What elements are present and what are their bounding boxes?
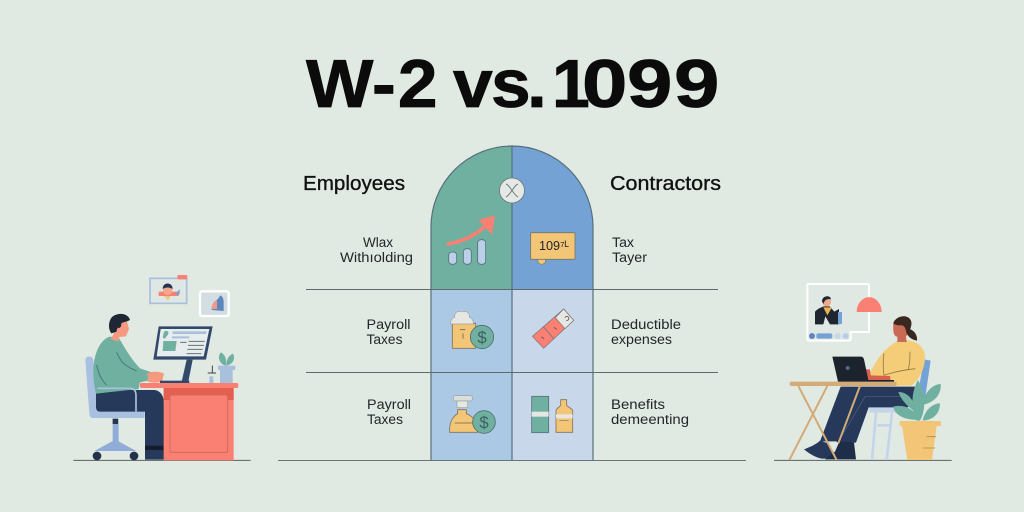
- icon: rising arrow and bars: [448, 215, 495, 264]
- floor line: [73, 459, 251, 462]
- title: vs.: [453, 46, 547, 122]
- hand: [147, 372, 164, 383]
- chair: [869, 359, 931, 460]
- icon: 1099 tax tag: [531, 233, 575, 264]
- icon: 1099 tax tag: 109⁷ᴸ: [539, 239, 570, 253]
- icon: bottle and dollar coin: $: [479, 413, 489, 432]
- potted plant: [218, 352, 235, 383]
- table: [789, 382, 897, 460]
- label: Wlax Withholding: Withıolding: [340, 250, 413, 265]
- head: [111, 320, 129, 342]
- label: Wlax Withholding: Wlax: [363, 235, 393, 250]
- title: [306, 45, 719, 122]
- floating white photo card: [200, 291, 229, 316]
- legs: [96, 390, 164, 460]
- label: Payroll Taxes row 3: Payroll: [367, 397, 411, 412]
- label: Payroll Taxes row 3: [367, 397, 411, 427]
- label: Benefits demeenting: [611, 397, 689, 427]
- label: Deductible expenses: expenses: [611, 332, 672, 347]
- icon: jar and dollar coin: [451, 311, 494, 349]
- heading: Contractors: Contractors: [610, 173, 721, 195]
- comparison arch table: [278, 146, 746, 460]
- illustration: contractor at table: [774, 284, 952, 460]
- shoes: [804, 441, 835, 459]
- arch outline: [431, 146, 593, 460]
- label: Tax Tayer: Tayer: [612, 250, 648, 265]
- legs: [820, 387, 918, 443]
- monitor: [153, 326, 213, 360]
- icon: versus badge: [500, 178, 524, 203]
- label: Payroll Taxes row 3: Taxes: [367, 412, 403, 427]
- label: Payroll Taxes row 2: Taxes: [366, 332, 403, 347]
- head: [893, 318, 909, 342]
- floor line: [774, 459, 952, 462]
- icon: bottle and dollar coin: [450, 396, 495, 433]
- laptop: [832, 357, 894, 382]
- heading: Employees: Employees: [303, 173, 405, 195]
- title: W-2: [306, 46, 438, 122]
- desk: [164, 387, 234, 460]
- label: Benefits demeenting: demeenting: [611, 412, 689, 427]
- video call window: [807, 284, 869, 341]
- icon: coral ruler: [532, 309, 574, 348]
- title: 1: [552, 46, 590, 122]
- baseline: [278, 460, 746, 462]
- panel: top right contractor cell: [512, 146, 593, 290]
- armrest: [97, 388, 136, 412]
- label: Tax Tayer: [612, 235, 648, 265]
- chair: [85, 356, 145, 460]
- panel: lower left cells: [431, 290, 512, 460]
- coral semicircle lamp: [857, 297, 882, 312]
- title: 099: [582, 45, 719, 121]
- label: Deductible expenses: Deductible: [611, 317, 681, 332]
- row dividers: [306, 290, 718, 372]
- illustration: employee at desk: [73, 275, 251, 460]
- potted plant: [893, 380, 941, 460]
- label: Wlax Withholding: [340, 235, 413, 265]
- label: Tax Tayer: Tax: [612, 235, 634, 250]
- icon: jar and dollar coin: $: [477, 328, 487, 347]
- panel: lower right cells: [512, 290, 593, 460]
- label: Payroll Taxes row 2: [366, 317, 410, 347]
- icon: booklet and bottle: [532, 396, 573, 433]
- label: Benefits demeenting: Benefits: [611, 397, 665, 412]
- torso: [93, 337, 152, 394]
- label: Deductible expenses: [611, 317, 681, 347]
- hand: [865, 369, 891, 381]
- floating photo card: [150, 275, 187, 303]
- panel: top left employee cell: [431, 146, 512, 290]
- torso: [869, 340, 925, 386]
- label: Payroll Taxes row 2: Payroll: [366, 317, 410, 332]
- desk pen holder: [208, 366, 216, 383]
